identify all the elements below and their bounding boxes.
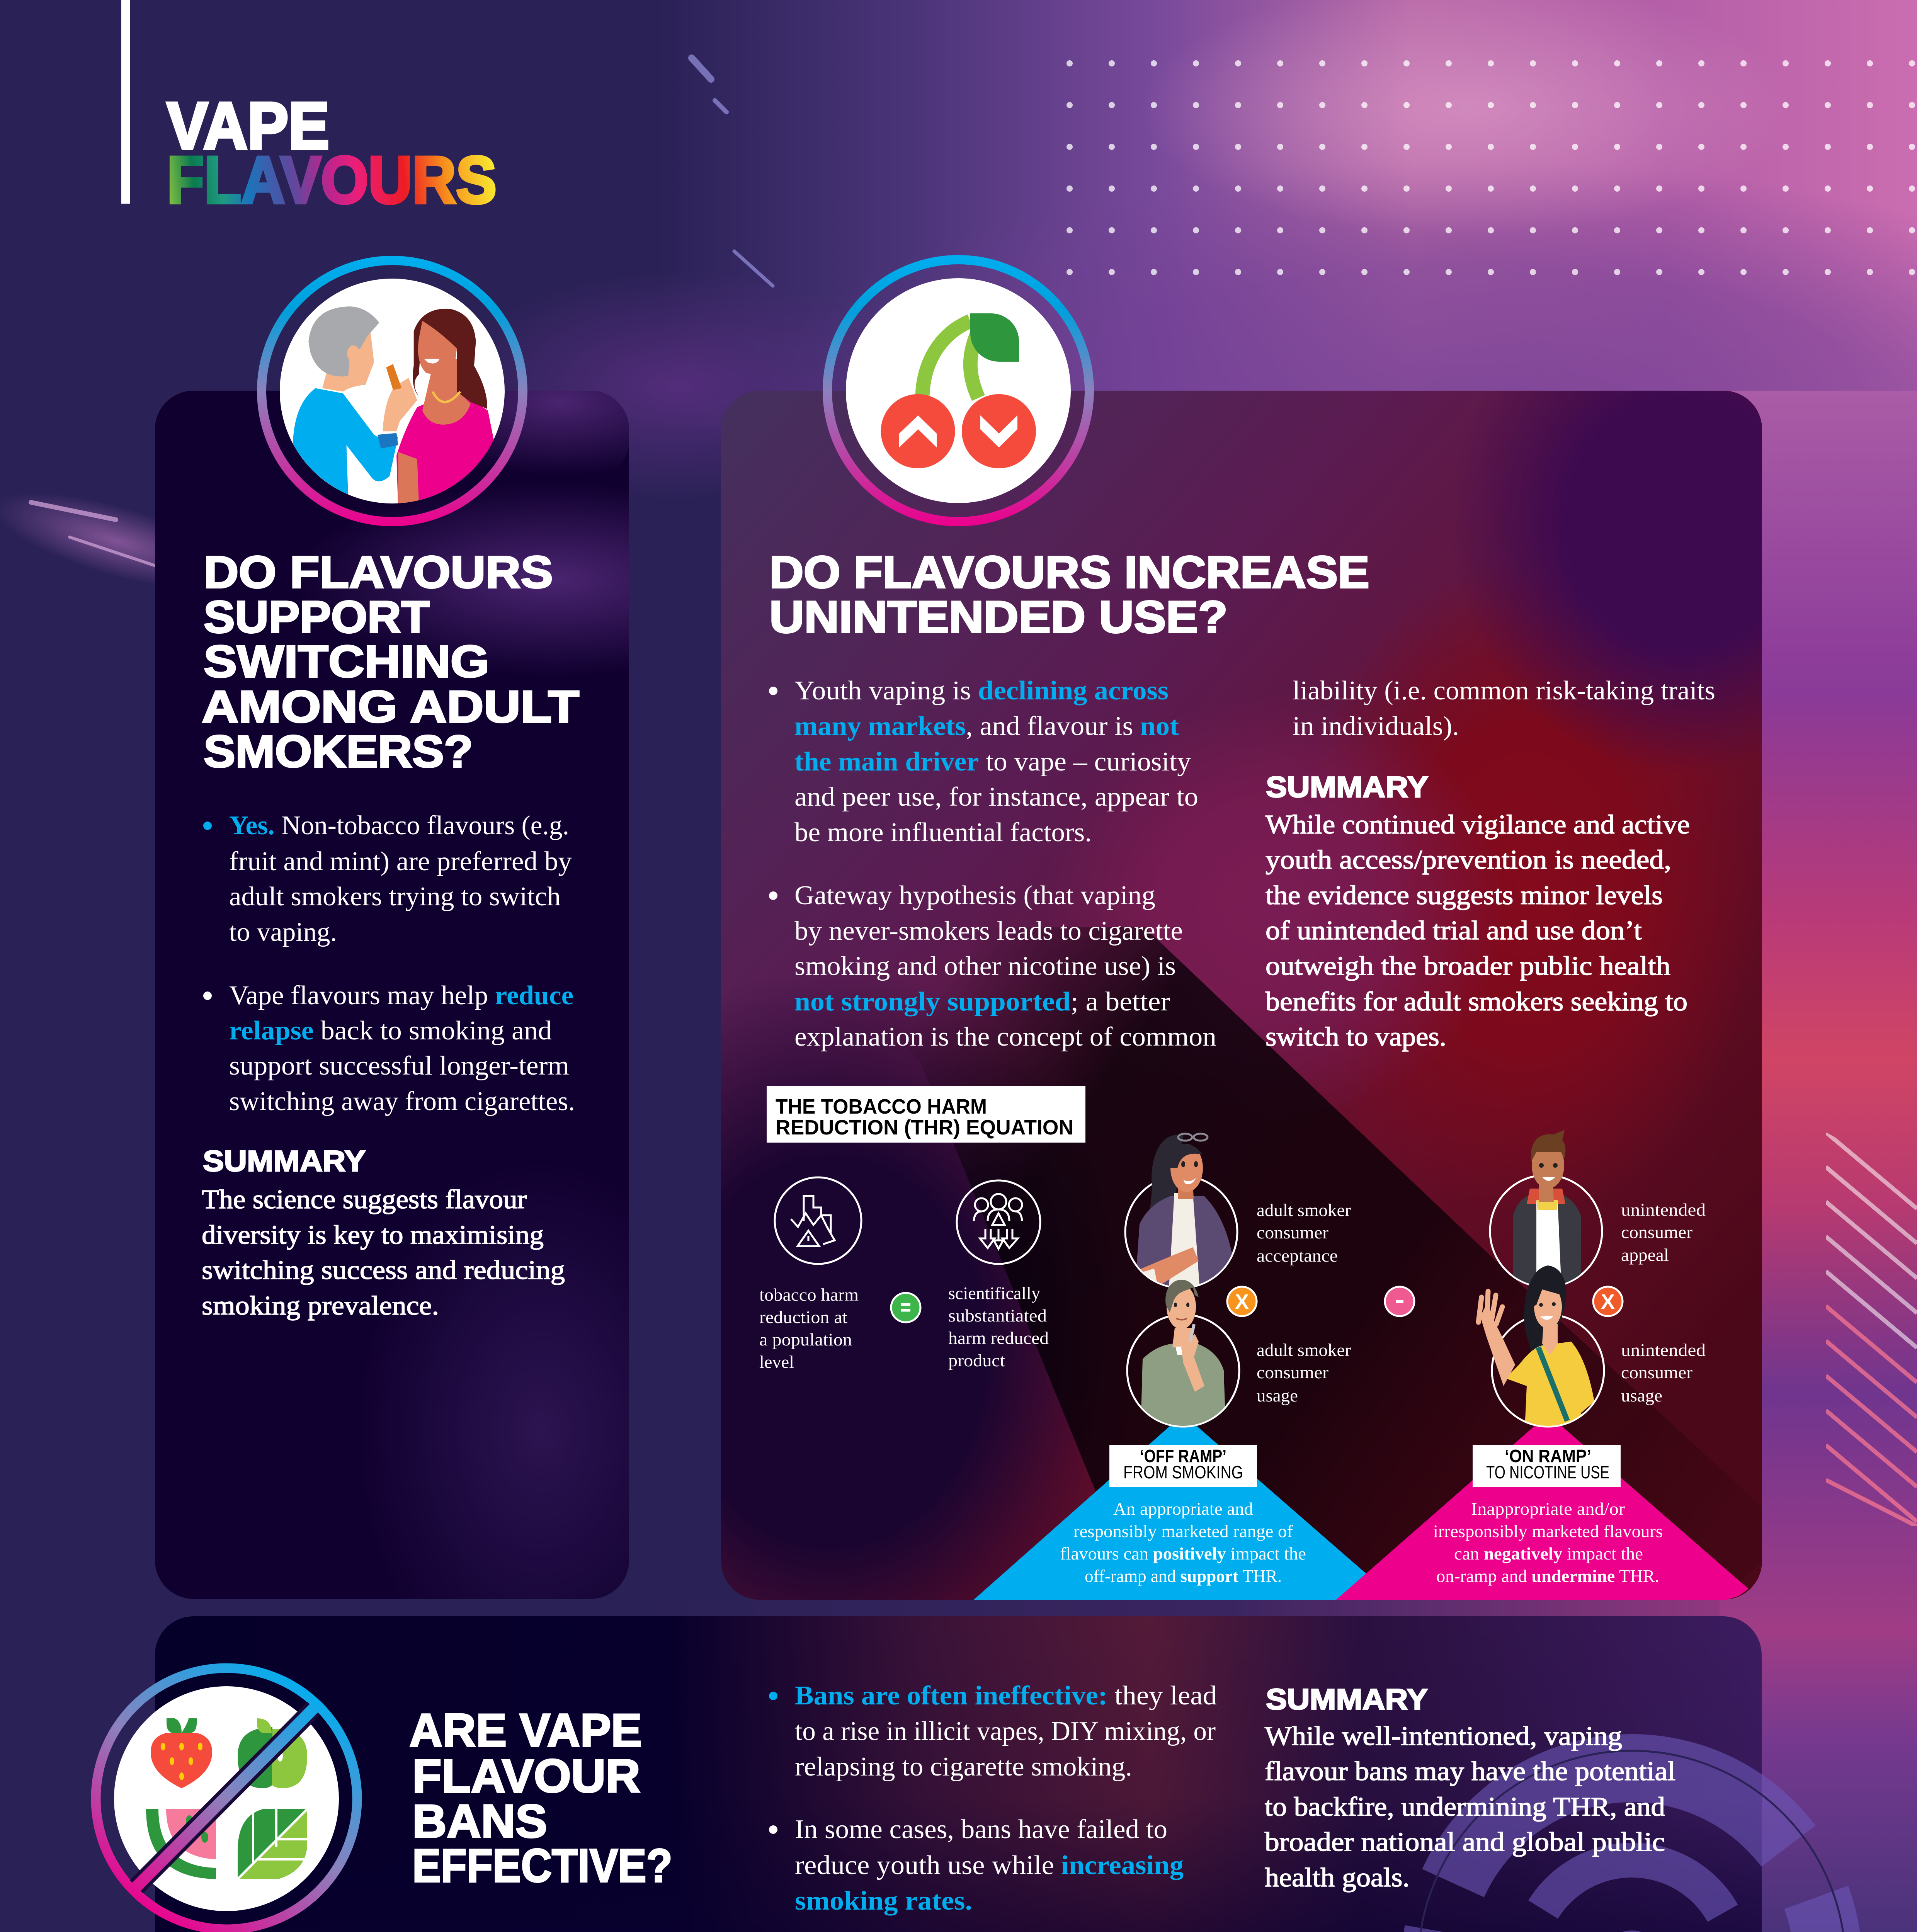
heading: are vape flavour bans effective — [409, 1704, 672, 1892]
text: tobacco harm reduction: a population — [759, 1330, 852, 1349]
heading: do flavours support switching: SWITCHING — [204, 636, 489, 687]
heading: are vape flavour bans effective: BANS — [412, 1795, 547, 1847]
text: unintended use bullets: and peer use, for instance, appear to — [794, 782, 1198, 812]
text: switching bullets: fruit and mint) are preferred by — [229, 847, 572, 876]
heading: do flavours support switching: SUPPORT — [204, 592, 430, 642]
operator: multiply left — [1227, 1287, 1257, 1316]
operator: equals — [891, 1293, 920, 1322]
text: switching bullets: Yes. Non-tobacco flavours (e.g. — [229, 811, 569, 840]
labels: adult smoker acceptance: adult smoker — [1257, 1200, 1351, 1220]
labels: adult smoker acceptance: consumer — [1257, 1223, 1328, 1242]
icon: cherries — [827, 260, 1089, 522]
text: scientifically substantiated product: substantiated — [948, 1306, 1047, 1325]
text: tobacco harm reduction: tobacco harm — [759, 1285, 859, 1304]
text: switching bullets: relapse back to smoking and — [229, 1016, 552, 1046]
icon: couple with vape — [262, 260, 523, 522]
summary: unintended use: youth access/prevention is needed, — [1266, 845, 1671, 875]
summary: bans: to backfire, undermining THR, and — [1265, 1792, 1665, 1822]
labels: unintended usage — [1621, 1340, 1706, 1405]
person: unintended consumer appeal — [1490, 1130, 1602, 1289]
title — [167, 89, 497, 217]
title bar — [121, 0, 130, 204]
person: unintended consumer usage — [1478, 1265, 1604, 1429]
summary: switching: The science suggests flavour — [202, 1185, 527, 1214]
icon: apple — [238, 1718, 307, 1788]
summary: bans — [1265, 1683, 1675, 1893]
text: scientifically substantiated product: product — [948, 1350, 1005, 1370]
text: off ramp explanation: An appropriate and — [1113, 1499, 1253, 1519]
text: switching bullets: switching away from cigarettes. — [229, 1087, 575, 1116]
icon: strawberry — [151, 1718, 212, 1788]
person: adult smoker usage — [1127, 1280, 1239, 1429]
summary: unintended use: benefits for adult smokers seeking to — [1266, 987, 1687, 1017]
text: scientifically substantiated product: harm reduced — [948, 1328, 1049, 1348]
heading: do flavours increase unintended use: UNINTENDED USE? — [769, 592, 1228, 642]
icon: watermelon — [146, 1809, 216, 1879]
operator: multiply right: X — [1601, 1290, 1615, 1313]
summary: unintended use: of unintended trial and use don’t — [1266, 916, 1642, 946]
label: off ramp: ‘OFF RAMP’ — [1140, 1446, 1226, 1466]
text: switching bullets: support successful longer-term — [229, 1051, 569, 1081]
text: tobacco harm reduction: reduction at — [759, 1307, 847, 1327]
text: unintended use bullets: the main driver to vape – curiosity — [794, 747, 1191, 777]
label: on ramp: ‘ON RAMP’ — [1505, 1446, 1591, 1466]
summary: bans: flavour bans may have the potential — [1265, 1757, 1675, 1786]
text: scientifically substantiated product — [948, 1283, 1049, 1370]
summary: switching — [202, 1145, 565, 1321]
summary: unintended use: SUMMARY — [1266, 771, 1428, 804]
text: unintended use bullets: many markets, and flavour is not — [794, 711, 1179, 741]
dot grid top right — [1067, 60, 1915, 275]
text: bans bullets: smoking rates. — [795, 1886, 972, 1916]
text: on ramp explanation: on-ramp and undermine THR. — [1436, 1566, 1659, 1586]
text: tobacco harm reduction — [759, 1285, 859, 1372]
icon: leaf — [238, 1809, 307, 1879]
text: tobacco harm reduction: level — [759, 1352, 794, 1372]
text: unintended use bullets: in individuals). — [1293, 711, 1459, 741]
text: on ramp explanation: irresponsibly marketed flavours — [1433, 1521, 1663, 1541]
summary: switching: switching success and reducing — [202, 1255, 565, 1285]
stripes right side — [1826, 1132, 1917, 1526]
labels: adult smoker usage: usage — [1257, 1386, 1298, 1405]
heading: do flavours support switching: AMONG ADULT — [202, 681, 579, 732]
labels: unintended appeal — [1621, 1200, 1706, 1265]
dark diagonal band — [785, 927, 1762, 1600]
text: unintended use bullets: explanation is the concept of common — [794, 1022, 1216, 1052]
text: bans bullets: In some cases, bans have failed to — [795, 1815, 1167, 1844]
labels: unintended appeal: appeal — [1621, 1245, 1669, 1265]
summary: bans: broader national and global public — [1265, 1827, 1665, 1857]
labels: unintended appeal: unintended — [1621, 1200, 1706, 1219]
summary: switching: SUMMARY — [203, 1145, 366, 1178]
summary: bans: While well-intentioned, vaping — [1265, 1721, 1622, 1751]
text: unintended use bullets: by never-smokers leads to cigarette — [794, 916, 1183, 946]
text: off ramp explanation: off-ramp and support THR. — [1085, 1566, 1282, 1586]
text: on ramp explanation: Inappropriate and/or — [1471, 1499, 1625, 1519]
panel: do flavours increase unintended use — [721, 391, 1762, 1600]
summary: bans: health goals. — [1265, 1863, 1410, 1893]
label: off ramp: FROM SMOKING — [1123, 1462, 1243, 1482]
title: FLAVOURS — [167, 143, 497, 217]
title: VAPE — [167, 89, 329, 163]
summary: unintended use — [1266, 771, 1690, 1052]
text: unintended use bullets: be more influential factors. — [794, 818, 1092, 847]
labels: adult smoker usage — [1257, 1340, 1351, 1405]
summary: switching: diversity is key to maximising — [202, 1220, 544, 1250]
operator: minus — [1385, 1287, 1414, 1316]
text: switching bullets: to vaping. — [229, 917, 337, 947]
text: unintended use bullets — [769, 676, 1715, 1052]
text: bans bullets — [769, 1681, 1217, 1916]
label: on ramp — [1473, 1445, 1621, 1487]
heading: do flavours increase unintended use — [769, 547, 1369, 642]
icon: banned flavours — [96, 1668, 357, 1929]
text: switching bullets: Vape flavours may help reduce — [229, 981, 573, 1010]
labels: adult smoker usage: consumer — [1257, 1362, 1328, 1382]
text: on ramp explanation — [1433, 1499, 1663, 1586]
labels: adult smoker acceptance — [1257, 1200, 1351, 1265]
label: on ramp: TO NICOTINE USE — [1486, 1462, 1609, 1482]
labels: unintended appeal: consumer — [1621, 1222, 1692, 1242]
operator: multiply left: X — [1235, 1290, 1249, 1313]
summary: bans: SUMMARY — [1266, 1683, 1428, 1716]
triangle: on ramp — [1336, 1414, 1749, 1600]
text: bans bullets: reduce youth use while increasing — [795, 1850, 1184, 1880]
equation heading: THE TOBACCO HARM — [776, 1095, 987, 1118]
icon: people with arrows — [957, 1180, 1040, 1264]
labels: unintended usage: usage — [1621, 1386, 1662, 1405]
text: bans bullets: Bans are often ineffective: they lead — [795, 1681, 1217, 1711]
heading: are vape flavour bans effective: EFFECTIVE? — [412, 1839, 672, 1892]
heading: are vape flavour bans effective: ARE VAPE — [409, 1704, 642, 1757]
text: scientifically substantiated product: scientifically — [948, 1283, 1040, 1303]
text: bans bullets: to a rise in illicit vapes, DIY mixing, or — [795, 1716, 1216, 1746]
labels: adult smoker acceptance: acceptance — [1257, 1246, 1338, 1265]
heading: are vape flavour bans effective: FLAVOUR — [412, 1750, 640, 1802]
labels: unintended usage: consumer — [1621, 1362, 1692, 1382]
text: switching bullets: adult smokers trying to switch — [229, 882, 561, 912]
text: on ramp explanation: can negatively impact the — [1454, 1544, 1643, 1563]
label: off ramp — [1109, 1445, 1257, 1487]
text: unintended use bullets: Youth vaping is declining across — [794, 676, 1169, 706]
ban slash — [136, 1708, 314, 1887]
decorative gear — [1380, 1713, 1883, 1932]
panel: are vape flavour bans effective — [155, 1616, 1762, 1932]
icon: falling bars warning — [775, 1177, 861, 1264]
summary: unintended use: the evidence suggests minor levels — [1266, 881, 1663, 910]
heading: do flavours increase unintended use: DO FLAVOURS INCREASE — [769, 547, 1369, 597]
text: unintended use bullets: Gateway hypothesis (that vaping — [794, 881, 1155, 910]
text: off ramp explanation: responsibly marketed range of — [1073, 1521, 1293, 1541]
labels: unintended usage: unintended — [1621, 1340, 1706, 1360]
heading: do flavours support switching — [202, 547, 579, 777]
panel: do flavours support switching — [155, 391, 629, 1599]
equation heading: REDUCTION (THR) EQUATION — [776, 1116, 1073, 1139]
summary: switching: smoking prevalence. — [202, 1291, 439, 1321]
text: off ramp explanation: flavours can positively impact the — [1060, 1544, 1306, 1563]
summary: unintended use: switch to vapes. — [1266, 1022, 1446, 1052]
equation heading — [767, 1086, 1085, 1143]
text: switching bullets — [203, 811, 575, 1116]
heading: do flavours support switching: DO FLAVOURS — [204, 547, 553, 597]
summary: unintended use: outweigh the broader public health — [1266, 951, 1670, 981]
text: unintended use bullets: liability (i.e. common risk-taking traits — [1293, 676, 1715, 706]
summary: unintended use: While continued vigilance and active — [1266, 810, 1690, 840]
triangle: off ramp — [974, 1414, 1396, 1600]
text: bans bullets: relapsing to cigarette smoking. — [795, 1752, 1132, 1782]
text: unintended use bullets: smoking and other nicotine use) is — [794, 951, 1176, 981]
labels: adult smoker usage: adult smoker — [1257, 1340, 1351, 1360]
operator: multiply right — [1593, 1287, 1623, 1316]
text: unintended use bullets: not strongly supported ; a better — [794, 987, 1170, 1017]
person: adult smoker acceptance — [1125, 1134, 1237, 1290]
text: off ramp explanation — [1060, 1499, 1306, 1586]
heading: do flavours support switching: SMOKERS? — [204, 726, 473, 777]
